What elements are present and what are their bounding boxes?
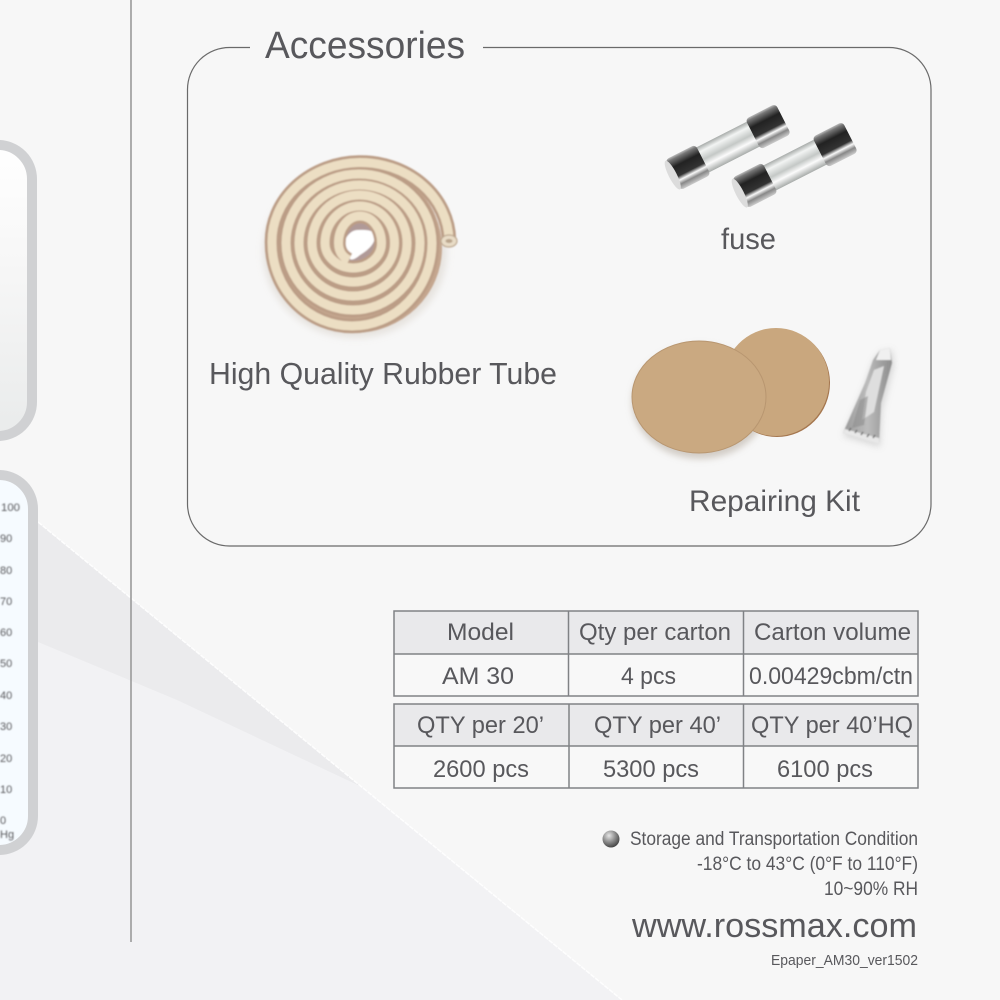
table: model and carton [394,611,918,696]
zoom wedge [38,522,362,787]
scale numbers: 90 [0,533,12,545]
value row [433,756,873,783]
label: fuse: fuse [721,223,776,256]
icon: bullet sphere [602,830,620,848]
panel: pressure scale [0,475,33,850]
header row: QTY per 20’ [417,712,544,739]
vertical divider [130,0,132,942]
icon: glue tube [843,348,894,447]
scale numbers: 0 [0,815,6,827]
header row: Qty per carton [579,619,731,646]
header row [417,712,913,739]
scale numbers: Hg [0,829,14,841]
fuse two [728,122,858,210]
storage condition text [630,829,918,900]
scale numbers: 50 [0,658,12,670]
panel: accessories frame [188,47,931,546]
value row: 2600 pcs [433,756,529,783]
table: container quantities [394,704,918,788]
header row: Carton volume [754,619,911,646]
value row: 4 pcs [621,663,676,690]
scale numbers: 100 [1,502,20,514]
scale numbers: 70 [0,596,12,608]
icon: fuses [661,104,858,210]
scale numbers: 20 [0,753,12,765]
label: rubber tube: High Quality Rubber Tube [209,356,557,391]
panel: upper device display [0,145,32,436]
storage condition text: 10~90% RH [824,879,918,900]
fuse one [661,104,791,192]
scale numbers: 30 [0,721,12,733]
scale numbers: 10 [0,784,12,796]
icon: repair patches [632,328,830,459]
scale numbers [0,502,20,841]
value row [442,663,913,690]
storage condition text: Storage and Transportation Condition [630,829,918,850]
value row: 6100 pcs [777,756,873,783]
value row: 5300 pcs [603,756,699,783]
header row [447,619,911,646]
storage condition text: -18°C to 43°C (0°F to 110°F) [697,854,918,875]
header row: QTY per 40’HQ [751,712,913,739]
scale numbers: 60 [0,627,12,639]
heading: Accessories: Accessories [265,25,465,67]
value row: AM 30 [442,663,514,690]
icon: coiled rubber tube [263,163,457,338]
scale numbers: 40 [0,690,12,702]
scale numbers: 80 [0,565,12,577]
header row: Model [447,619,514,646]
label: repairing kit: Repairing Kit [689,485,861,518]
value row: 0.00429cbm/ctn [749,663,913,690]
header row: QTY per 40’ [594,712,721,739]
website: www.rossmax.com [631,907,917,945]
version code: Epaper_AM30_ver1502 [771,952,918,969]
